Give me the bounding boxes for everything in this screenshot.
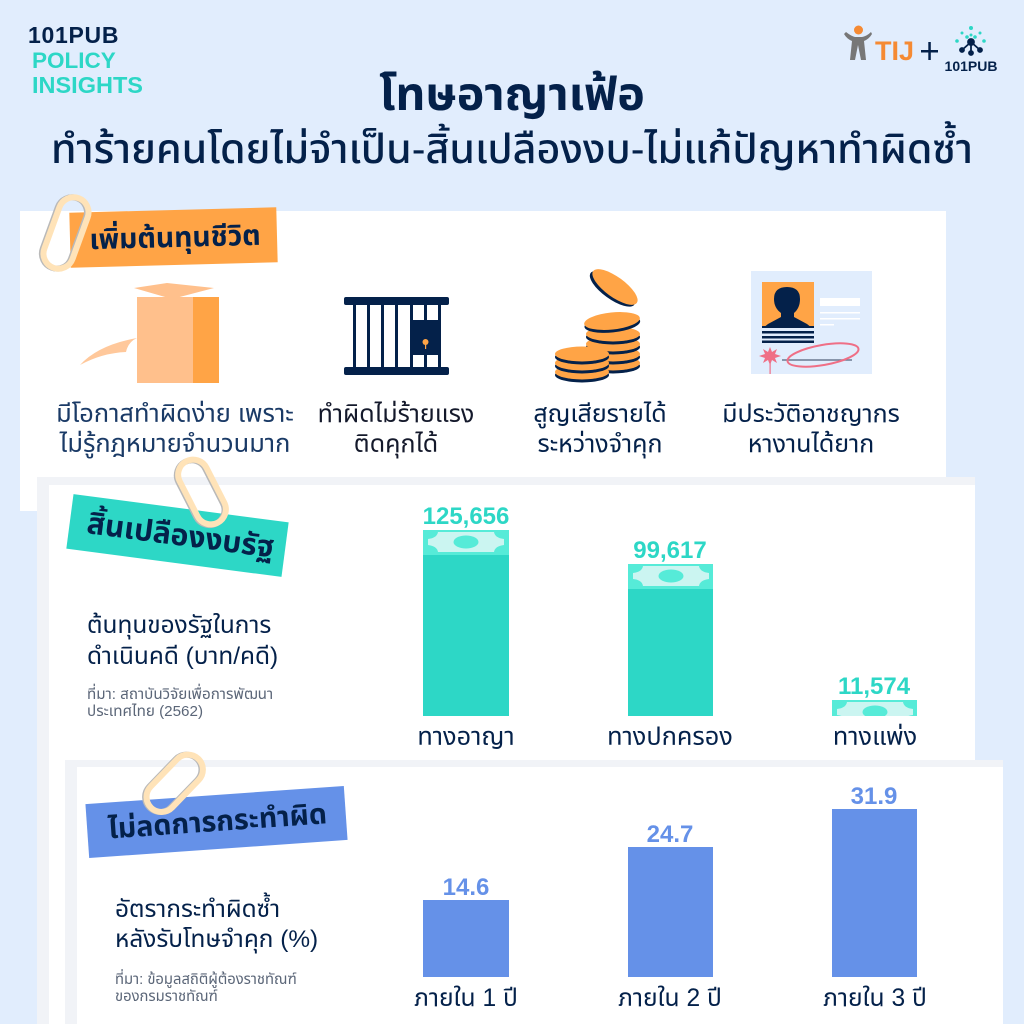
panel: reoffending bbox=[65, 760, 1003, 1024]
label: criminal: ทางอาญา bbox=[417, 723, 515, 751]
text: source corrections dept: ของกรมราชทัณฑ์ bbox=[115, 989, 218, 1005]
caption: lost income: สูญเสียรายได้ bbox=[533, 400, 667, 428]
icon: criminal record bbox=[751, 271, 872, 374]
caption: lost income: ระหว่างจำคุก bbox=[537, 430, 663, 458]
label: within 1 year: ภายใน 1 ปี bbox=[414, 985, 518, 1012]
text: state cost per case bbox=[87, 612, 278, 670]
title: ทำร้ายคนโดยไม่จำเป็น-สิ้นเปลืองงบ-ไม่แก้ปัญหาทำผิดซ้ำ bbox=[51, 126, 973, 172]
tag: life costs bbox=[69, 207, 278, 268]
text: source TDRI bbox=[87, 684, 273, 720]
icon: coins bbox=[555, 269, 640, 382]
text: source TDRI: ประเทศไทย (2562) bbox=[87, 703, 203, 720]
bar: within 2 years: 24.7 bbox=[647, 821, 693, 848]
bar: within 2 years bbox=[628, 821, 713, 977]
caption: hard to find work bbox=[722, 400, 900, 458]
text: reoffending rate: อัตรากระทำผิดซ้ำ bbox=[115, 896, 280, 923]
logos: TIJ + 101PUB: 101PUB bbox=[945, 58, 997, 74]
logo: 101PUB Policy Insights: POLICY bbox=[32, 48, 116, 73]
title: โทษอาญาเฟ้อ bbox=[379, 68, 645, 120]
panel: state budget bbox=[37, 477, 975, 1024]
logo: 101PUB Policy Insights: INSIGHTS bbox=[32, 72, 143, 98]
text: reoffending rate bbox=[115, 892, 318, 954]
icon: jail bars bbox=[344, 297, 449, 375]
bar: within 3 years: 31.9 bbox=[851, 783, 897, 810]
caption: easy to offend bbox=[56, 400, 294, 458]
caption: easy to offend: ไม่รู้กฎหมายจำนวนมาก bbox=[60, 430, 290, 458]
text: source corrections dept: ที่มา: ข้อมูลสถิติผู้ต้องราชทัณฑ์ bbox=[115, 972, 297, 988]
bar: criminal 125,656 bbox=[423, 503, 509, 716]
icon: paper clip 1 bbox=[38, 194, 92, 272]
tag: reoffending bbox=[85, 786, 348, 858]
bar: civil 11,574: 11,574 bbox=[838, 673, 910, 700]
label: within 3 years: ภายใน 3 ปี bbox=[823, 985, 927, 1012]
title bbox=[51, 68, 973, 172]
logos: TIJ + 101PUB: TIJ bbox=[875, 36, 914, 66]
bar: within 3 years bbox=[832, 783, 917, 977]
icon: paper clip 2 bbox=[174, 456, 229, 528]
text: state cost per case: ต้นทุนของรัฐในการ bbox=[87, 612, 271, 639]
text: reoffending rate: หลังรับโทษจำคุก (%) bbox=[115, 926, 318, 953]
text: state cost per case: ดำเนินคดี (บาท/คดี) bbox=[87, 643, 278, 670]
logo: 101PUB Policy Insights: 101PUB bbox=[28, 22, 119, 48]
caption: hard to find work: หางานได้ยาก bbox=[748, 430, 874, 458]
logos: TIJ + 101PUB bbox=[844, 26, 997, 74]
caption: jail for minor offences: ติดคุกได้ bbox=[354, 430, 438, 458]
bar: civil 11,574 bbox=[832, 673, 917, 716]
text: source TDRI: ที่มา: สถาบันวิจัยเพื่อการพัฒนา bbox=[87, 686, 273, 703]
text: source corrections dept bbox=[115, 969, 297, 1005]
caption: lost income bbox=[533, 400, 667, 458]
bar: within 1 year: 14.6 bbox=[443, 874, 489, 901]
caption: jail for minor offences: ทำผิดไม่ร้ายแรง bbox=[318, 400, 474, 428]
tag: life costs: เพิ่มต้นทุนชีวิต bbox=[89, 219, 261, 256]
bar: administrative 99,617: 99,617 bbox=[633, 537, 707, 564]
caption: hard to find work: มีประวัติอาชญากร bbox=[722, 400, 900, 428]
bar: criminal 125,656: 125,656 bbox=[423, 503, 509, 530]
icon: law book bbox=[80, 283, 219, 383]
tag: state budget bbox=[66, 494, 289, 577]
icon: paper clip 3 bbox=[142, 752, 206, 815]
label: administrative: ทางปกครอง bbox=[607, 723, 733, 751]
tag: reoffending: ไม่ลดการกระทำผิด bbox=[107, 798, 328, 845]
bar: administrative 99,617 bbox=[628, 537, 713, 716]
label: civil: ทางแพ่ง bbox=[833, 723, 917, 751]
caption: jail for minor offences bbox=[318, 400, 474, 458]
logo: 101PUB Policy Insights bbox=[28, 22, 143, 98]
label: within 2 years: ภายใน 2 ปี bbox=[618, 985, 722, 1012]
caption: easy to offend: มีโอกาสทำผิดง่าย เพราะ bbox=[56, 400, 294, 428]
panel: life costs bbox=[20, 211, 946, 511]
bar: within 1 year bbox=[423, 874, 509, 977]
tag: state budget: สิ้นเปลืองงบรัฐ bbox=[85, 507, 276, 564]
